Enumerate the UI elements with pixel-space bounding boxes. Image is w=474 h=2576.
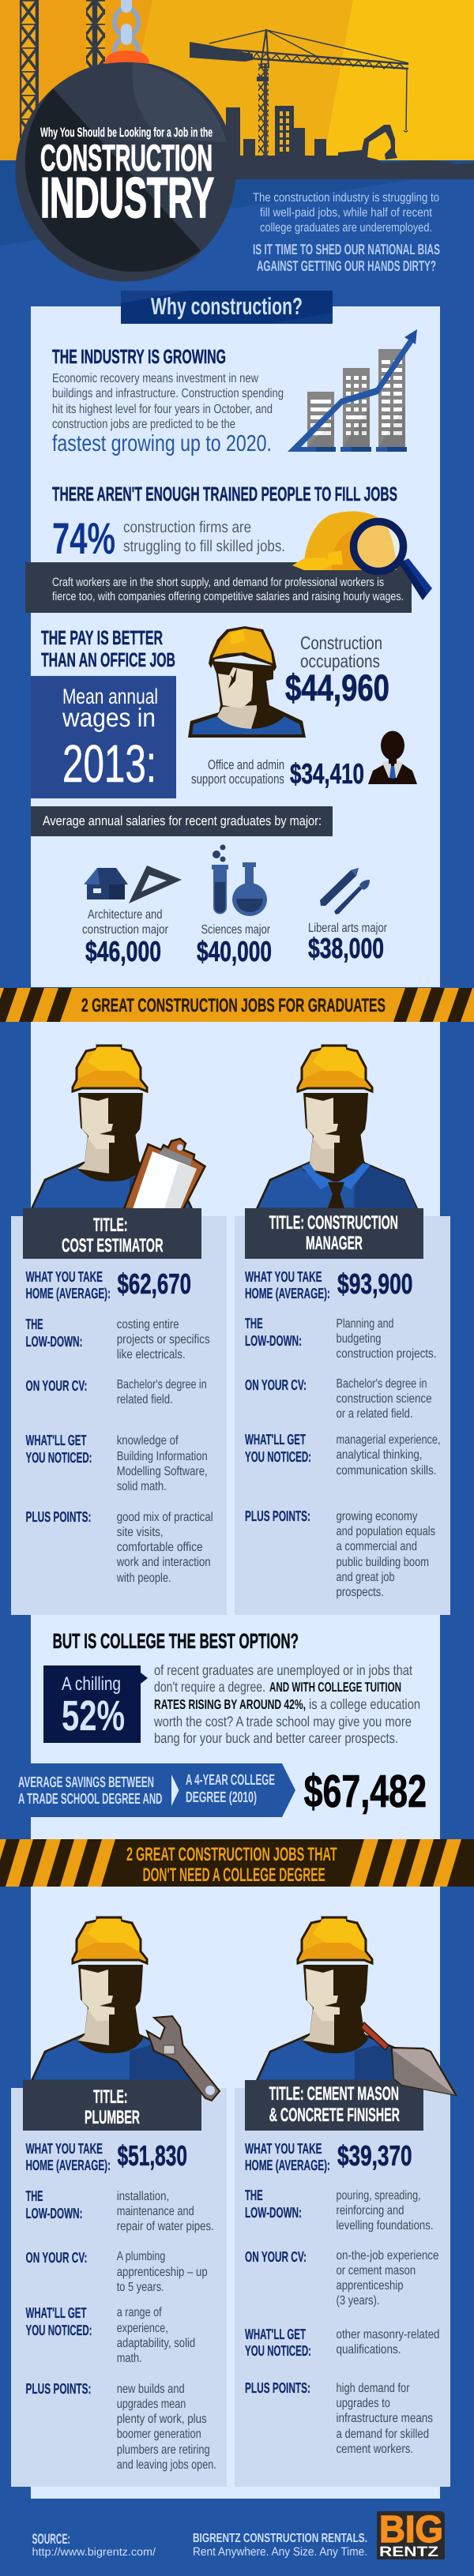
major: liberal arts: $38,000 xyxy=(308,932,384,964)
icon: wrecking ball xyxy=(16,51,235,281)
intro text: college graduates are underemployed. xyxy=(260,221,432,235)
major: architecture: Architecture and xyxy=(88,908,163,922)
title box xyxy=(245,1208,423,1259)
icon: test tube and flask xyxy=(212,845,267,916)
plus points: PLUS POINTS: xyxy=(245,2379,310,2396)
section: the industry is growing xyxy=(52,329,417,456)
callout: 52 percent xyxy=(43,1665,148,1743)
heading: why construction xyxy=(121,291,333,324)
heading: THE PAY IS BETTER xyxy=(41,627,163,649)
banner: hazard stripe no degree: 2 GREAT CONSTRUCTION JOBS THAT xyxy=(126,1844,337,1865)
icon: construction worker bust xyxy=(188,626,306,738)
salary: WHAT YOU TAKE xyxy=(25,1268,103,1285)
title box xyxy=(23,1208,201,1259)
panel: cement mason xyxy=(235,1917,456,2487)
arrow banner: average savings: A TRADE SCHOOL DEGREE AND xyxy=(18,1791,163,1808)
plus points: high demand for xyxy=(337,2382,410,2395)
arrow banner: average savings xyxy=(18,1763,295,1817)
major: sciences: $40,000 xyxy=(197,935,272,967)
text block: don't require a degree. xyxy=(154,1679,265,1695)
section: is college the best option xyxy=(18,1629,427,1817)
construction wage xyxy=(285,633,389,708)
office wage: Office and admin xyxy=(208,757,284,772)
heading: why construction: Why construction? xyxy=(151,294,303,320)
text block: worth the cost? A trade school may give you more xyxy=(153,1714,412,1729)
what will get you noticed: WHAT'LL GET xyxy=(245,1431,306,1448)
plus points: with people. xyxy=(116,1572,171,1585)
chart: buildings with rising arrow xyxy=(288,329,417,452)
icon: house and set square xyxy=(84,866,182,903)
plus points: infrastructure means xyxy=(337,2412,433,2425)
office wage: support occupations xyxy=(191,772,284,787)
what will get you noticed: knowledge of xyxy=(117,1434,179,1448)
plus points: prospects. xyxy=(337,1586,384,1599)
plus points: and great job xyxy=(337,1571,395,1584)
text block xyxy=(153,1662,420,1746)
on your cv xyxy=(245,2248,439,2308)
on your cv: ON YOUR CV: xyxy=(245,2248,307,2265)
icon: worker with clipboard xyxy=(32,1046,205,1209)
salary xyxy=(245,2139,412,2173)
low-down: LOW-DOWN: xyxy=(245,1332,302,1349)
icon: worker xyxy=(257,1917,417,2081)
what will get you noticed: analytical thinking, xyxy=(337,1448,422,1462)
what will get you noticed: managerial experience, xyxy=(337,1433,441,1447)
salary: HOME (AVERAGE): xyxy=(25,1285,111,1301)
what will get you noticed: WHAT'LL GET xyxy=(25,1432,87,1448)
intro text: The construction industry is struggling to xyxy=(253,191,439,205)
band heading xyxy=(31,806,333,836)
on your cv: to 5 years. xyxy=(117,2281,164,2294)
plus points: work and interaction xyxy=(116,1556,211,1569)
major: sciences: Sciences major xyxy=(201,923,271,937)
what will get you noticed: qualifications. xyxy=(337,2343,401,2356)
what will get you noticed: WHAT'LL GET xyxy=(25,2304,87,2321)
on your cv: apprenticeship – up xyxy=(117,2266,208,2279)
salary: WHAT YOU TAKE xyxy=(245,2140,322,2157)
text block: bang for your buck and better career prospects. xyxy=(154,1730,398,1746)
title: CONSTRUCTION xyxy=(40,137,213,178)
low-down: installation, xyxy=(117,2190,169,2203)
on your cv: apprenticeship xyxy=(337,2279,404,2292)
plus points: site visits, xyxy=(117,1526,164,1539)
text block: AND WITH COLLEGE TUITION xyxy=(269,1680,401,1695)
low-down: Planning and xyxy=(337,1317,393,1331)
low-down: construction projects. xyxy=(337,1347,436,1361)
panel: mean annual wages xyxy=(31,676,176,798)
low-down xyxy=(245,2187,433,2232)
salary: HOME (AVERAGE): xyxy=(245,1285,330,1301)
low-down xyxy=(25,2187,214,2233)
office wage: $34,410 xyxy=(290,757,364,790)
panel: mean annual wages: 2013: xyxy=(62,734,156,794)
text block: is a college education xyxy=(309,1696,420,1712)
what will get you noticed: YOU NOTICED: xyxy=(245,2342,311,2359)
icon: hard hat and magnifier xyxy=(292,511,432,600)
panel: light content middle xyxy=(31,1022,440,1839)
plus points: and leaving jobs open. xyxy=(117,2458,216,2472)
text block: RATES RISING BY AROUND 42%, xyxy=(154,1697,306,1712)
plus points: a demand for skilled xyxy=(337,2428,429,2441)
on your cv: or a related field. xyxy=(337,1407,412,1421)
plus points: good mix of practical xyxy=(117,1511,213,1524)
low-down: LOW-DOWN: xyxy=(245,2204,302,2221)
callout band xyxy=(25,562,412,613)
title box: TITLE: xyxy=(93,2086,128,2108)
title box xyxy=(23,2080,201,2131)
title box: COST ESTIMATOR xyxy=(62,1235,164,1256)
what will get you noticed xyxy=(245,1431,441,1478)
low-down: reinforcing and xyxy=(337,2204,404,2217)
low-down xyxy=(25,1316,210,1361)
footer xyxy=(32,2509,445,2559)
intro text: fill well-paid jobs, while half of recent xyxy=(260,206,433,220)
what will get you noticed: other masonry-related xyxy=(337,2328,439,2341)
arrow banner: average savings: A 4-YEAR COLLEGE xyxy=(186,1772,275,1789)
panel: cost estimator xyxy=(11,1046,227,1615)
what will get you noticed: experience, xyxy=(117,2322,168,2335)
banner: hazard stripe no degree xyxy=(0,1839,474,1887)
plus points: PLUS POINTS: xyxy=(25,2380,92,2397)
icon: chain xyxy=(115,0,138,65)
what will get you noticed xyxy=(25,1432,208,1493)
major: sciences xyxy=(197,923,272,967)
statistic: 74% xyxy=(52,513,115,563)
text block: construction jobs are predicted to be the xyxy=(52,418,235,431)
low-down: pouring, spreading, xyxy=(337,2189,420,2202)
title: INDUSTRY xyxy=(40,167,214,230)
low-down: budgeting xyxy=(337,1332,381,1346)
on your cv: on-the-job experience xyxy=(337,2249,439,2262)
major: liberal arts: Liberal arts major xyxy=(308,922,388,935)
low-down: LOW-DOWN: xyxy=(25,1333,82,1350)
text block xyxy=(52,372,284,431)
plus points: public building boom xyxy=(337,1556,429,1569)
section: not enough trained people xyxy=(25,483,432,613)
major: architecture: construction major xyxy=(82,923,169,937)
what will get you noticed: YOU NOTICED: xyxy=(25,1449,92,1466)
on your cv: or cement mason xyxy=(337,2264,416,2277)
text block: of recent graduates are unemployed or in jobs that xyxy=(154,1662,412,1678)
text block: struggling to fill skilled jobs. xyxy=(123,538,285,555)
what will get you noticed xyxy=(25,2304,195,2365)
what will get you noticed xyxy=(245,2326,439,2359)
salary: $93,900 xyxy=(337,1267,412,1300)
plus points: upgrades mean xyxy=(117,2398,186,2411)
what will get you noticed: Building Information xyxy=(117,1450,208,1463)
panel: mean annual wages: Mean annual xyxy=(62,685,158,708)
icon: crane and skyline xyxy=(190,29,474,179)
callout: fastest growing up to 2020. xyxy=(52,431,272,456)
on your cv: A plumbing xyxy=(117,2250,165,2263)
salary xyxy=(25,2139,187,2173)
low-down: LOW-DOWN: xyxy=(25,2205,82,2221)
plus points: boomer generation xyxy=(117,2428,201,2441)
icon: office worker xyxy=(368,731,417,784)
callout: 52 percent: 52% xyxy=(62,1692,125,1740)
title box: TITLE: xyxy=(93,1215,128,1236)
tagline xyxy=(193,2532,367,2559)
what will get you noticed: WHAT'LL GET xyxy=(245,2326,306,2342)
panel: light content bottom xyxy=(31,1887,440,2499)
on your cv: ON YOUR CV: xyxy=(245,1376,307,1393)
what will get you noticed: YOU NOTICED: xyxy=(245,1448,311,1465)
on your cv: ON YOUR CV: xyxy=(25,1377,87,1394)
what will get you noticed: a range of xyxy=(117,2306,162,2319)
source xyxy=(32,2531,156,2558)
tagline: Rent Anywhere. Any Size. Any Time. xyxy=(193,2545,367,2559)
logo: BigRentz: BIG xyxy=(379,2509,443,2551)
icon: wrench xyxy=(147,2016,220,2101)
low-down: THE xyxy=(245,2187,263,2203)
plus points: and population equals xyxy=(337,1525,435,1538)
on your cv: construction science xyxy=(337,1392,432,1406)
salary: $51,830 xyxy=(117,2139,187,2172)
plus points xyxy=(245,2379,433,2456)
low-down: maintenance and xyxy=(117,2205,194,2218)
low-down: THE xyxy=(25,1316,43,1332)
construction wage: $44,960 xyxy=(285,667,389,708)
what will get you noticed: Modelling Software, xyxy=(117,1465,208,1478)
plus points: upgrades to xyxy=(337,2397,390,2410)
salary: WHAT YOU TAKE xyxy=(245,1268,322,1285)
plus points: PLUS POINTS: xyxy=(245,1508,310,1524)
icon: worker with tie xyxy=(257,1046,417,1209)
section: pay is better: THAN AN OFFICE JOB xyxy=(41,649,175,671)
panel: construction manager xyxy=(235,1046,450,1615)
major: architecture xyxy=(82,908,169,967)
icon: lattice towers xyxy=(20,0,105,138)
office wage xyxy=(191,757,364,790)
panel: plumber xyxy=(11,1917,227,2487)
plus points: PLUS POINTS: xyxy=(25,1508,92,1525)
heading: BUT IS COLLEGE THE BEST OPTION? xyxy=(53,1629,299,1653)
on your cv: Bachelor's degree in xyxy=(337,1377,427,1391)
plus points: cement workers. xyxy=(337,2443,413,2456)
low-down: projects or specifics xyxy=(117,1333,210,1346)
title box: MANAGER xyxy=(306,1233,363,1254)
text block: construction firms are xyxy=(123,519,251,536)
construction wage: Construction xyxy=(300,633,382,653)
title box: PLUMBER xyxy=(85,2107,140,2128)
icon: pencil and brush xyxy=(320,868,370,914)
callout: 52 percent: A chilling xyxy=(62,1673,121,1695)
salary xyxy=(245,1267,412,1301)
icon: trowel xyxy=(361,2022,456,2095)
tagline: BIGRENTZ CONSTRUCTION RENTALS. xyxy=(193,2532,367,2545)
callout band: fierce too, with companies offering competitive salaries and raising hourly wages. xyxy=(52,590,404,603)
plus points xyxy=(25,1508,213,1585)
salary: WHAT YOU TAKE xyxy=(25,2140,103,2157)
icon: worker xyxy=(32,1917,192,2081)
salary: HOME (AVERAGE): xyxy=(25,2157,111,2173)
band heading: Average annual salaries for recent graduates by major: xyxy=(43,813,322,828)
text block xyxy=(123,519,285,555)
on your cv: Bachelor's degree in xyxy=(117,1378,207,1391)
what will get you noticed: adaptability, solid xyxy=(117,2337,195,2350)
major: liberal arts xyxy=(308,922,388,964)
low-down: THE xyxy=(245,1315,263,1331)
plus points: plumbers are retiring xyxy=(117,2443,210,2457)
section: salaries by major xyxy=(31,806,388,967)
construction wage: occupations xyxy=(300,651,380,671)
on your cv: (3 years). xyxy=(337,2294,379,2308)
salary xyxy=(25,1267,191,1301)
plus points: new builds and xyxy=(117,2383,185,2396)
on your cv: ON YOUR CV: xyxy=(25,2249,87,2266)
title box xyxy=(245,2080,423,2131)
what will get you noticed: solid math. xyxy=(117,1480,167,1493)
salary: HOME (AVERAGE): xyxy=(245,2157,330,2173)
on your cv xyxy=(25,1377,207,1406)
salary: $39,370 xyxy=(337,2139,412,2172)
low-down: repair of water pipes. xyxy=(117,2220,214,2233)
low-down: like electricals. xyxy=(117,1348,186,1361)
low-down: levelling foundations. xyxy=(337,2219,433,2232)
source: http://www.bigrentz.com/ xyxy=(32,2545,156,2558)
on your cv xyxy=(25,2249,208,2294)
low-down: THE xyxy=(25,2187,43,2204)
plus points xyxy=(25,2380,216,2472)
logo: BigRentz: RENTZ xyxy=(379,2544,438,2559)
heading: THE INDUSTRY IS GROWING xyxy=(52,346,226,368)
source: SOURCE: xyxy=(32,2531,70,2547)
arrow banner: average savings: AVERAGE SAVINGS BETWEEN xyxy=(18,1774,154,1791)
what will get you noticed: YOU NOTICED: xyxy=(25,2322,92,2338)
banner: hazard stripe graduates xyxy=(0,988,474,1022)
on your cv: related field. xyxy=(117,1393,173,1406)
plus points: a commercial and xyxy=(337,1540,417,1553)
panel: hero header xyxy=(0,0,474,281)
major: architecture: $46,000 xyxy=(85,935,161,967)
plus points: plenty of work, plus xyxy=(117,2413,207,2426)
on your cv xyxy=(245,1376,432,1421)
section: pay is better xyxy=(31,626,417,798)
plus points: comfortable office xyxy=(117,1541,203,1554)
intro text xyxy=(253,191,440,274)
text block: buildings and infrastructure. Construction spending xyxy=(52,387,284,400)
what will get you noticed: math. xyxy=(117,2352,142,2365)
what will get you noticed: communication skills. xyxy=(337,1464,436,1478)
panel: mean annual wages: wages in xyxy=(62,703,156,732)
salary: $62,670 xyxy=(117,1267,191,1300)
plus points: growing economy xyxy=(337,1510,417,1523)
callout band: Craft workers are in the short supply, and demand for professional workers is xyxy=(52,576,384,589)
low-down xyxy=(245,1315,436,1361)
panel: light content top xyxy=(31,306,440,987)
low-down: costing entire xyxy=(117,1318,179,1331)
banner: hazard stripe no degree: DON'T NEED A COLLEGE DEGREE xyxy=(143,1864,325,1886)
title: Why You Should be Looking for a Job in the xyxy=(40,126,213,140)
plus points xyxy=(245,1508,435,1599)
title xyxy=(40,126,214,230)
text block: Economic recovery means investment in new xyxy=(52,372,258,385)
statistic: savings: $67,482 xyxy=(304,1766,427,1817)
text block: hit its highest level for four years in October, and xyxy=(52,403,273,416)
arrow banner: average savings: DEGREE (2010) xyxy=(186,1789,257,1806)
